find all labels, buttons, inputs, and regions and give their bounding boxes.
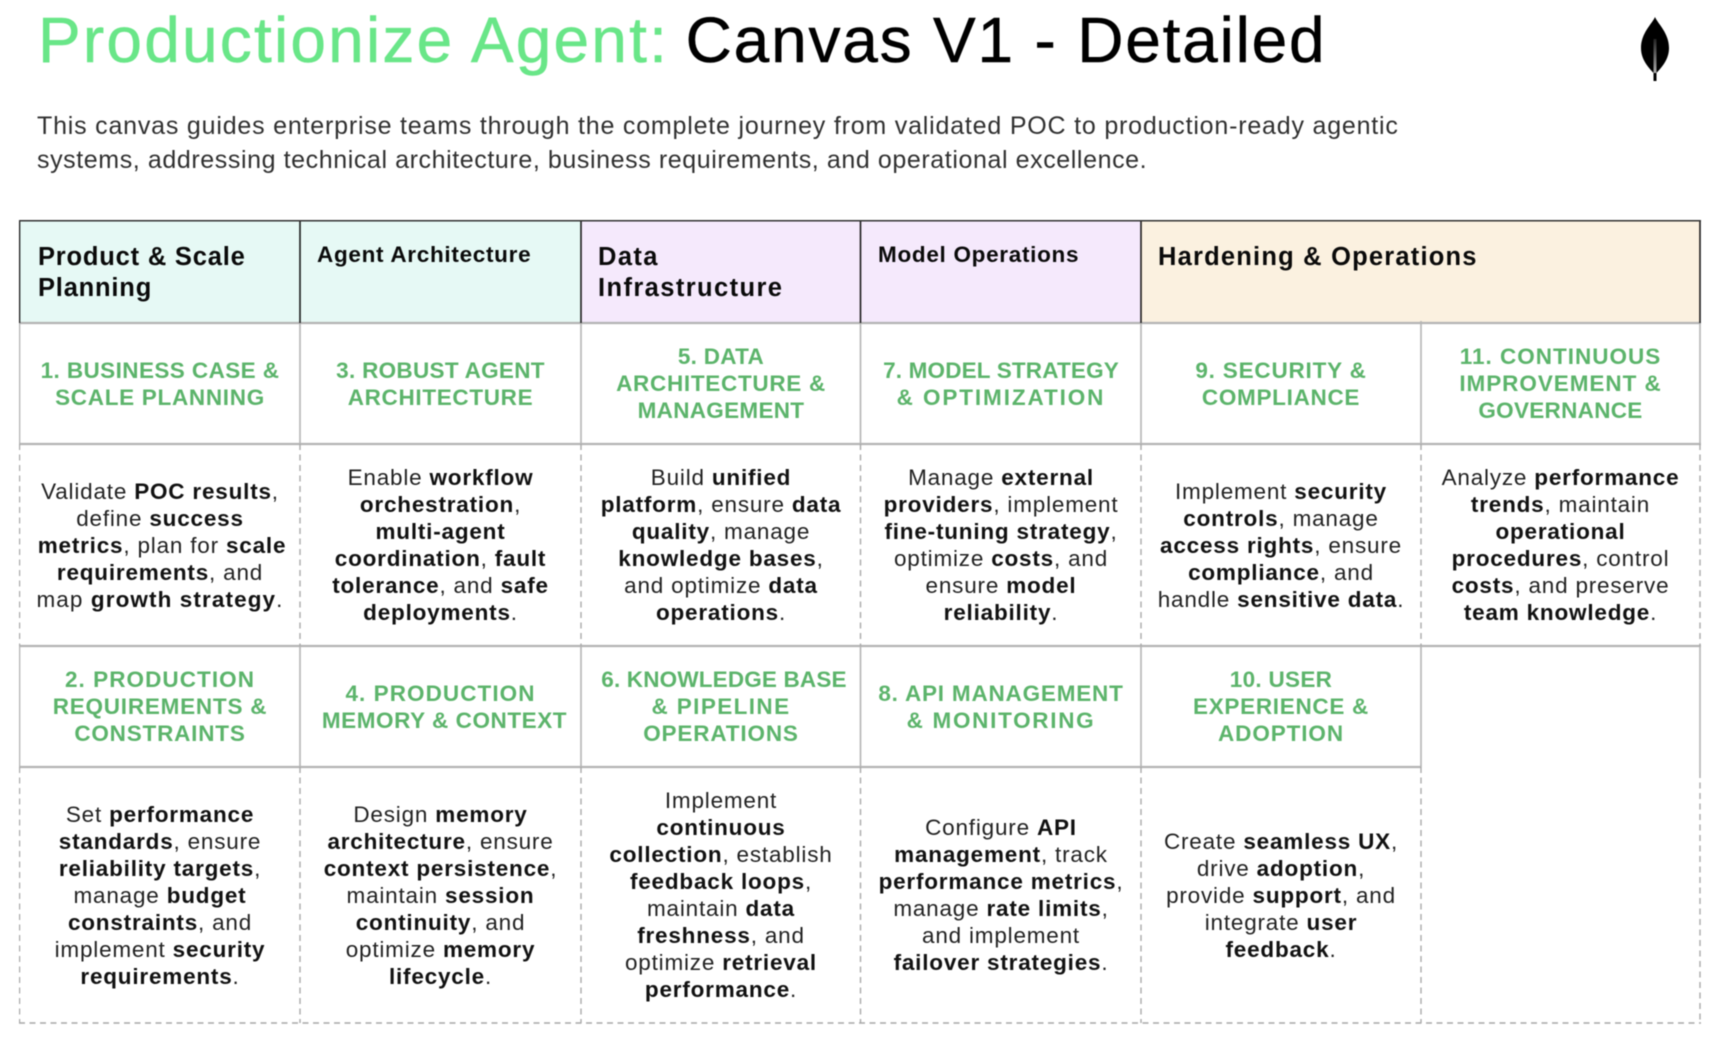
header: Data Infrastructure: Infrastructure: [598, 274, 783, 302]
section 10 heading: ADOPTION: [1218, 721, 1344, 746]
section 9 description: [1158, 478, 1404, 612]
section 10 description: drive adoption,: [1197, 856, 1365, 880]
section 9 description: compliance, and: [1188, 560, 1374, 584]
section 9 heading: COMPLIANCE: [1202, 384, 1360, 410]
section 8 description: performance metrics,: [879, 869, 1123, 894]
section 6 description: performance.: [645, 977, 797, 1002]
section 11 description: team knowledge.: [1464, 600, 1657, 625]
section 4 heading: [322, 680, 567, 732]
section 3 heading: ARCHITECTURE: [348, 384, 533, 410]
section 8 heading: [878, 680, 1124, 732]
section 4 description: Design memory: [353, 802, 528, 826]
section 5 heading: [616, 344, 826, 423]
section 7 description: ensure model: [926, 573, 1076, 598]
header: Hardening & Operations: Hardening & Operations: [1158, 243, 1478, 271]
section 3 description: [332, 465, 549, 626]
section 9 description: Implement security: [1175, 478, 1387, 504]
icon: leaf logo: [1640, 16, 1670, 82]
section 6 description: [609, 788, 833, 1002]
section 7 description: [884, 465, 1118, 626]
section 2 description: standards, ensure: [59, 828, 261, 854]
subtitle text block: [36, 112, 1399, 174]
section 4 description: context persistence,: [324, 856, 557, 880]
header: Hardening & Operations: [1141, 221, 1700, 323]
section 7 heading: & OPTIMIZATION: [897, 384, 1105, 410]
header: Agent Architecture: Agent Architecture: [317, 242, 531, 267]
section 7 description: Manage external: [908, 465, 1094, 490]
section 6 description: collection, establish: [609, 842, 833, 867]
section 2 description: manage budget: [74, 882, 246, 908]
section 5 description: operations.: [656, 600, 786, 625]
header: Model Operations: [861, 221, 1141, 323]
section 6 description: feedback loops,: [630, 869, 812, 894]
section 11 heading: 11. CONTINUOUS: [1460, 344, 1661, 369]
section 6 description: Implement: [665, 788, 777, 813]
section 11 heading: IMPROVEMENT &: [1459, 371, 1662, 396]
section 6 description: optimize retrieval: [625, 950, 817, 975]
section 3 description: coordination, fault: [335, 546, 546, 571]
section 5 description: platform, ensure data: [601, 492, 841, 517]
section 1 description: metrics, plan for scale: [38, 532, 286, 558]
section 10 description: provide support, and: [1166, 882, 1396, 908]
section 11 description: procedures, control: [1452, 546, 1669, 571]
section 10 description: feedback.: [1225, 936, 1336, 962]
section 2 heading: CONSTRAINTS: [74, 721, 246, 746]
section 3 heading: [336, 358, 545, 410]
section 5 heading: ARCHITECTURE &: [616, 371, 826, 396]
section 3 description: multi-agent: [375, 519, 506, 544]
section 10 heading: EXPERIENCE &: [1193, 694, 1369, 719]
subtitle text block: This canvas guides enterprise teams through the complete journey from validated POC to production-ready agentic: [37, 112, 1399, 140]
section 5 description: [601, 465, 842, 626]
section 1 heading: 1. BUSINESS CASE &: [41, 358, 279, 382]
section 6 heading: [601, 667, 847, 746]
header: Product & Scale Planning: Product & Scale: [38, 243, 246, 271]
section 4 description: [324, 802, 557, 990]
section 8 description: manage rate limits,: [893, 896, 1109, 921]
header: Data Infrastructure: Data: [598, 243, 659, 271]
section 8 description: [879, 815, 1123, 976]
section 10 description: Create seamless UX,: [1164, 828, 1398, 854]
section 2 description: Set performance: [66, 802, 254, 826]
section 9 heading: [1195, 358, 1367, 410]
section 10 description: integrate user: [1205, 910, 1357, 934]
section 7 description: fine-tuning strategy,: [884, 519, 1118, 544]
section 7 heading: [883, 358, 1119, 410]
section 9 description: handle sensitive data.: [1158, 586, 1404, 612]
section 5 description: quality, manage: [632, 519, 810, 544]
section 8 description: failover strategies.: [894, 950, 1108, 975]
title: Productionize Agent: Canvas V1 - Detailed: [38, 4, 1326, 76]
section 2 description: requirements.: [80, 964, 240, 988]
section 2 description: implement security: [55, 936, 265, 962]
section 5 description: Build unified: [651, 465, 791, 490]
section 4 description: optimize memory: [346, 936, 535, 962]
section 11 description: operational: [1495, 519, 1626, 544]
section 3 description: deployments.: [363, 600, 518, 625]
section 8 description: and implement: [922, 923, 1080, 948]
section 2 heading: [53, 667, 267, 746]
section 1 description: Validate POC results,: [41, 478, 279, 504]
header: Model Operations: Model Operations: [878, 242, 1079, 267]
section 4 heading: 4. PRODUCTION: [345, 680, 536, 706]
section 11 description: [1441, 465, 1679, 626]
section 9 description: controls, manage: [1183, 506, 1379, 530]
section 8 description: management, track: [894, 842, 1108, 867]
section 2 description: reliability targets,: [59, 856, 261, 880]
section 5 description: knowledge bases,: [618, 546, 824, 571]
section 11 description: trends, maintain: [1471, 492, 1650, 517]
section 6 description: continuous: [656, 815, 786, 840]
section 10 description: [1164, 828, 1398, 962]
section 3 description: Enable workflow: [348, 465, 533, 490]
section 5 description: and optimize data: [624, 573, 818, 598]
section 4 description: lifecycle.: [389, 964, 492, 988]
section 11 heading: GOVERNANCE: [1478, 398, 1643, 423]
section 4 heading: MEMORY & CONTEXT: [322, 708, 567, 732]
section 1 description: map growth strategy.: [36, 586, 284, 612]
section 1 description: requirements, and: [57, 560, 263, 584]
section 1 heading: [41, 358, 279, 410]
section 6 description: freshness, and: [637, 923, 805, 948]
section 6 description: maintain data: [647, 896, 795, 921]
header: Product & Scale Planning: [20, 221, 300, 323]
section 4 description: maintain session: [347, 882, 534, 908]
section 4 description: architecture, ensure: [327, 828, 554, 854]
section 9 heading: 9. SECURITY &: [1195, 358, 1367, 382]
section 4 description: continuity, and: [356, 910, 525, 934]
section 1 heading: SCALE PLANNING: [55, 384, 265, 410]
section 10 heading: [1193, 667, 1369, 746]
section 7 description: optimize costs, and: [894, 546, 1108, 571]
section 3 heading: 3. ROBUST AGENT: [336, 358, 545, 382]
section 1 description: define success: [76, 506, 244, 530]
section 11 description: costs, and preserve: [1452, 573, 1669, 598]
section 11 description: Analyze performance: [1442, 465, 1679, 490]
header: Product & Scale Planning: Planning: [38, 274, 152, 302]
section 6 heading: OPERATIONS: [643, 721, 799, 746]
header: Agent Architecture: [300, 221, 581, 323]
section 8 heading: & MONITORING: [907, 708, 1095, 732]
section 5 heading: 5. DATA: [678, 344, 764, 369]
section 6 heading: 6. KNOWLEDGE BASE: [601, 667, 847, 692]
section 2 heading: 2. PRODUCTION: [65, 667, 255, 692]
section 6 heading: & PIPELINE: [651, 694, 790, 719]
section 7 description: providers, implement: [884, 492, 1118, 517]
section 7 heading: 7. MODEL STRATEGY: [883, 358, 1119, 382]
section 8 heading: 8. API MANAGEMENT: [878, 680, 1124, 706]
section 8 description: Configure API: [925, 815, 1077, 840]
header: Data Infrastructure: [581, 221, 861, 323]
section 5 heading: MANAGEMENT: [638, 398, 804, 423]
section 2 description: constraints, and: [68, 910, 252, 934]
section 3 description: orchestration,: [360, 492, 521, 517]
subtitle text block: systems, addressing technical architecture, business requirements, and operational excellence.: [37, 146, 1147, 174]
section 2 description: [55, 802, 265, 990]
section 9 description: access rights, ensure: [1160, 532, 1402, 558]
section 3 description: tolerance, and safe: [332, 573, 549, 598]
canvas table: [18, 219, 1702, 1024]
section 7 description: reliability.: [944, 600, 1058, 625]
section 2 heading: REQUIREMENTS &: [53, 694, 267, 719]
section 10 heading: 10. USER: [1230, 667, 1332, 692]
section 1 description: [36, 478, 286, 612]
section 11 heading: [1459, 344, 1662, 423]
